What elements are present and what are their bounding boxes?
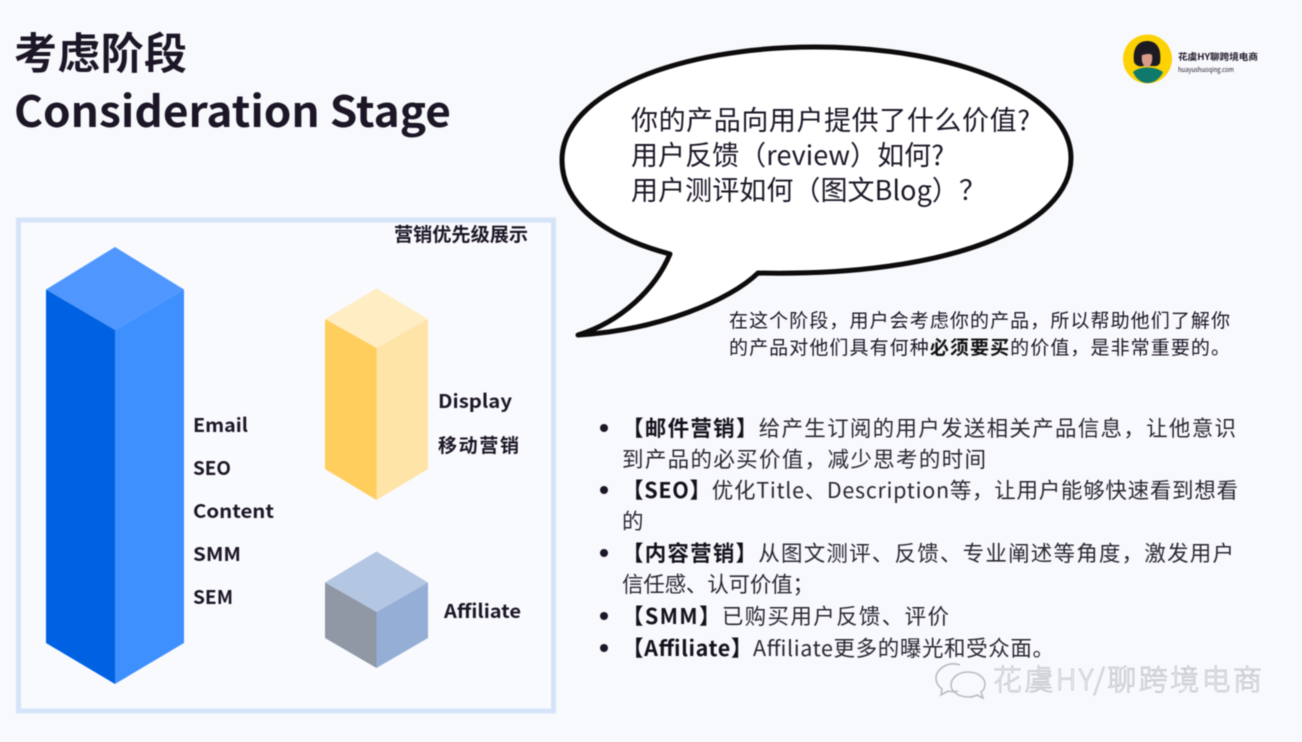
logo: author avatar and name: [1123, 34, 1258, 84]
blue column labels: SMM: [193, 540, 241, 567]
blue column labels: SEO: [193, 454, 231, 481]
intro paragraph: 在这个阶段，用户会考虑你的产品，所以帮助他们了解你: [729, 306, 1230, 333]
yellow column labels: [438, 387, 519, 458]
blue column labels: Email: [193, 411, 248, 438]
bullet: content marketing: 信任感、认可价值；: [622, 568, 814, 599]
title: 考虑阶段: [14, 20, 187, 82]
bullet: affiliate: 【Affiliate】Affiliate更多的曝光和受众面。: [622, 632, 1054, 663]
bullet: content marketing: 【内容营销】从图文测评、反馈、专业阐述等角度，激发用户: [622, 537, 1234, 568]
blue column labels: Content: [193, 497, 274, 524]
grey-blue cube: [325, 552, 428, 668]
bubble questions: 用户反馈（review）如何?: [631, 134, 944, 173]
yellow column labels: 移动营销: [438, 431, 519, 458]
logo: author avatar and name: 花虞HY聊跨境电商: [1178, 50, 1258, 63]
bullet list: [600, 412, 1238, 663]
bubble questions: 用户测评如何（图文Blog）？: [631, 169, 986, 208]
bullet: SMM: 【SMM】已购买用户反馈、评价: [622, 600, 949, 631]
speech bubble: [562, 47, 1071, 335]
blue column labels: [193, 411, 274, 610]
logo: author avatar and name: huayushuoqing.com: [1178, 65, 1234, 75]
bullet: content marketing: [600, 537, 1234, 599]
bullet: SEO: [600, 474, 1238, 536]
bubble questions: 你的产品向用户提供了什么价值?: [631, 99, 1030, 138]
icon: chat bubbles: [936, 664, 985, 698]
watermark: 花虞HY/聊跨境电商: [993, 657, 1262, 699]
blue column labels: SEM: [193, 583, 233, 610]
title: Consideration Stage: [14, 78, 451, 140]
intro paragraph: [729, 306, 1230, 360]
bullet: SEO: 的: [622, 505, 644, 536]
bullet: email marketing: [600, 412, 1236, 474]
bullet: SEO: 【SEO】优化Title、Description等，让用户能够快速看到想看: [622, 474, 1238, 505]
title: [14, 20, 451, 140]
bubble questions: [631, 99, 1030, 208]
yellow column labels: Display: [438, 387, 512, 414]
bullet: email marketing: 到产品的必买价值，减少思考的时间: [622, 443, 986, 474]
yellow column: [325, 288, 428, 500]
panel: marketing priority: [18, 220, 554, 711]
bullet: email marketing: 【邮件营销】给产生订阅的用户发送相关产品信息，让他意识: [622, 412, 1236, 443]
blue column: [46, 247, 184, 684]
cube label: Affiliate: [443, 597, 521, 624]
panel heading: 营销优先级展示: [394, 220, 528, 247]
intro paragraph: 的产品对他们具有何种必须要买的价值，是非常重要的。: [729, 333, 1230, 360]
